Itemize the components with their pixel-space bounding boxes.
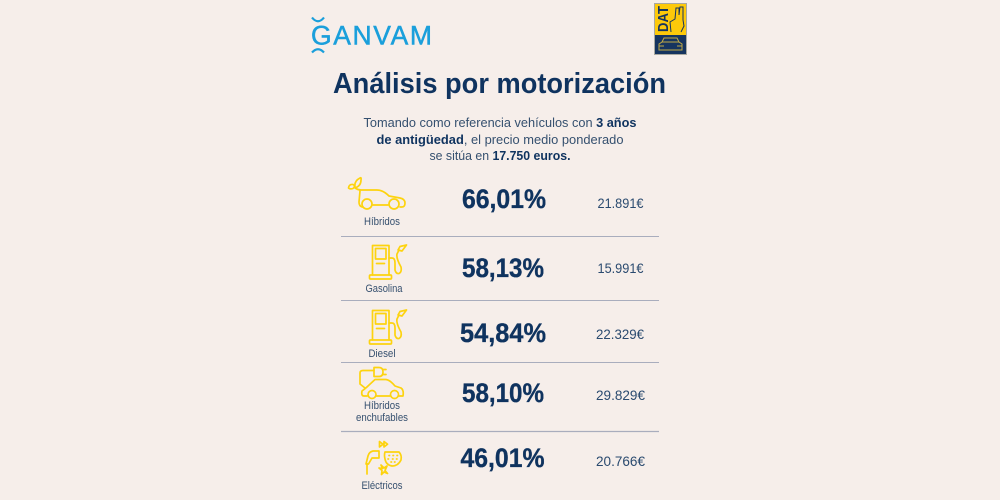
icon: diesel pump — [370, 310, 406, 344]
label: Diesel — [368, 348, 396, 360]
intro text: de antigüedad, el precio medio ponderado — [376, 132, 624, 147]
logo: GANVAM: GANVAM — [311, 20, 432, 50]
label: Eléctricos — [362, 480, 403, 492]
percentage: 58,10% — [462, 378, 544, 408]
price: 22.329€ — [596, 327, 644, 342]
row: Diesel — [368, 310, 644, 360]
row: Híbridos enchufables — [356, 368, 645, 424]
row: Híbridos — [348, 178, 644, 228]
label: Híbridos — [364, 216, 400, 228]
percentage: 66,01% — [462, 184, 546, 214]
logo: DAT — [654, 4, 686, 54]
row: Eléctricos — [362, 442, 645, 492]
price: 29.829€ — [596, 388, 645, 403]
label line 2: enchufables — [356, 412, 408, 424]
percentage: 54,84% — [460, 318, 546, 348]
title: Análisis por motorización — [333, 68, 666, 100]
price: 15.991€ — [598, 261, 644, 276]
icon: plug-in hybrid car — [360, 368, 403, 398]
price: 20.766€ — [596, 454, 645, 469]
intro text: se sitúa en 17.750 euros. — [430, 148, 570, 163]
logo: DAT: DAT — [655, 6, 672, 32]
percentage: 58,13% — [462, 253, 544, 283]
price: 21.891€ — [598, 196, 644, 211]
intro text — [364, 115, 636, 163]
label: Gasolina — [366, 283, 403, 295]
intro text: Tomando como referencia vehículos con 3 años — [364, 115, 636, 130]
row: Gasolina — [366, 245, 644, 295]
label: Híbridos — [364, 400, 400, 412]
icon: electric charger — [366, 442, 401, 474]
percentage: 46,01% — [460, 443, 544, 473]
icon: fuel pump — [370, 245, 406, 279]
icon: hybrid car with leaf — [348, 178, 405, 209]
